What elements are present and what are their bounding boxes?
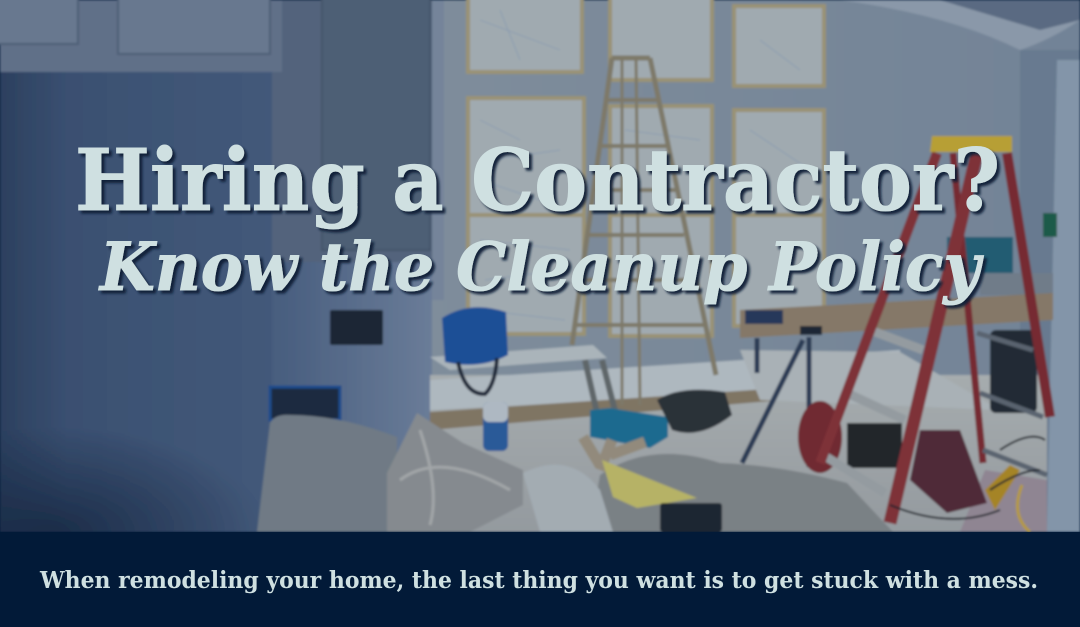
title	[75, 131, 1000, 306]
yellow ladder top	[930, 136, 1012, 152]
heading line 2: Know the Cleanup Policy	[98, 228, 984, 306]
upper cabinets	[0, 0, 282, 72]
red compressor	[910, 430, 987, 513]
left wall	[0, 70, 272, 532]
back wall	[430, 0, 1080, 400]
tool belt	[657, 390, 732, 433]
blue cooler bag	[442, 307, 508, 365]
drop cloth at left	[257, 415, 397, 532]
step ladder in back	[572, 58, 716, 405]
rear ladder rails	[953, 153, 1050, 463]
floor	[430, 375, 1047, 532]
plastic bags	[387, 413, 523, 532]
blue box	[270, 387, 340, 420]
water bottle	[483, 402, 508, 451]
drop cloth at right	[590, 454, 893, 532]
sawhorse board	[740, 293, 1053, 338]
teal toolbox	[590, 408, 668, 448]
front ladder rails	[820, 153, 977, 523]
heading line 1: Hiring a Contractor?	[75, 131, 1000, 231]
black bin	[990, 330, 1037, 413]
window frames	[468, 0, 824, 336]
red reel	[798, 401, 842, 473]
teal tool case and gear	[947, 237, 1013, 273]
pillar on right	[1047, 60, 1080, 532]
floor rug	[960, 470, 1047, 532]
baseboards and lumber	[430, 350, 900, 410]
rear braces	[977, 333, 1047, 475]
footer text: When remodeling your home, the last thing you want is to get stuck with a mess.	[39, 566, 1038, 594]
dark bucket	[660, 503, 722, 532]
cords	[1018, 485, 1030, 532]
wood scraps	[583, 437, 645, 470]
tall cabinet	[272, 0, 444, 262]
dark equipment	[847, 423, 902, 468]
footer band	[0, 532, 1080, 627]
outlet box	[330, 310, 383, 345]
yellow paper	[602, 460, 697, 508]
right wall and ceiling arch	[1020, 50, 1080, 532]
window sketches	[480, 10, 810, 320]
ladder steps	[823, 330, 923, 493]
white bag	[523, 465, 613, 532]
bench	[430, 345, 607, 370]
